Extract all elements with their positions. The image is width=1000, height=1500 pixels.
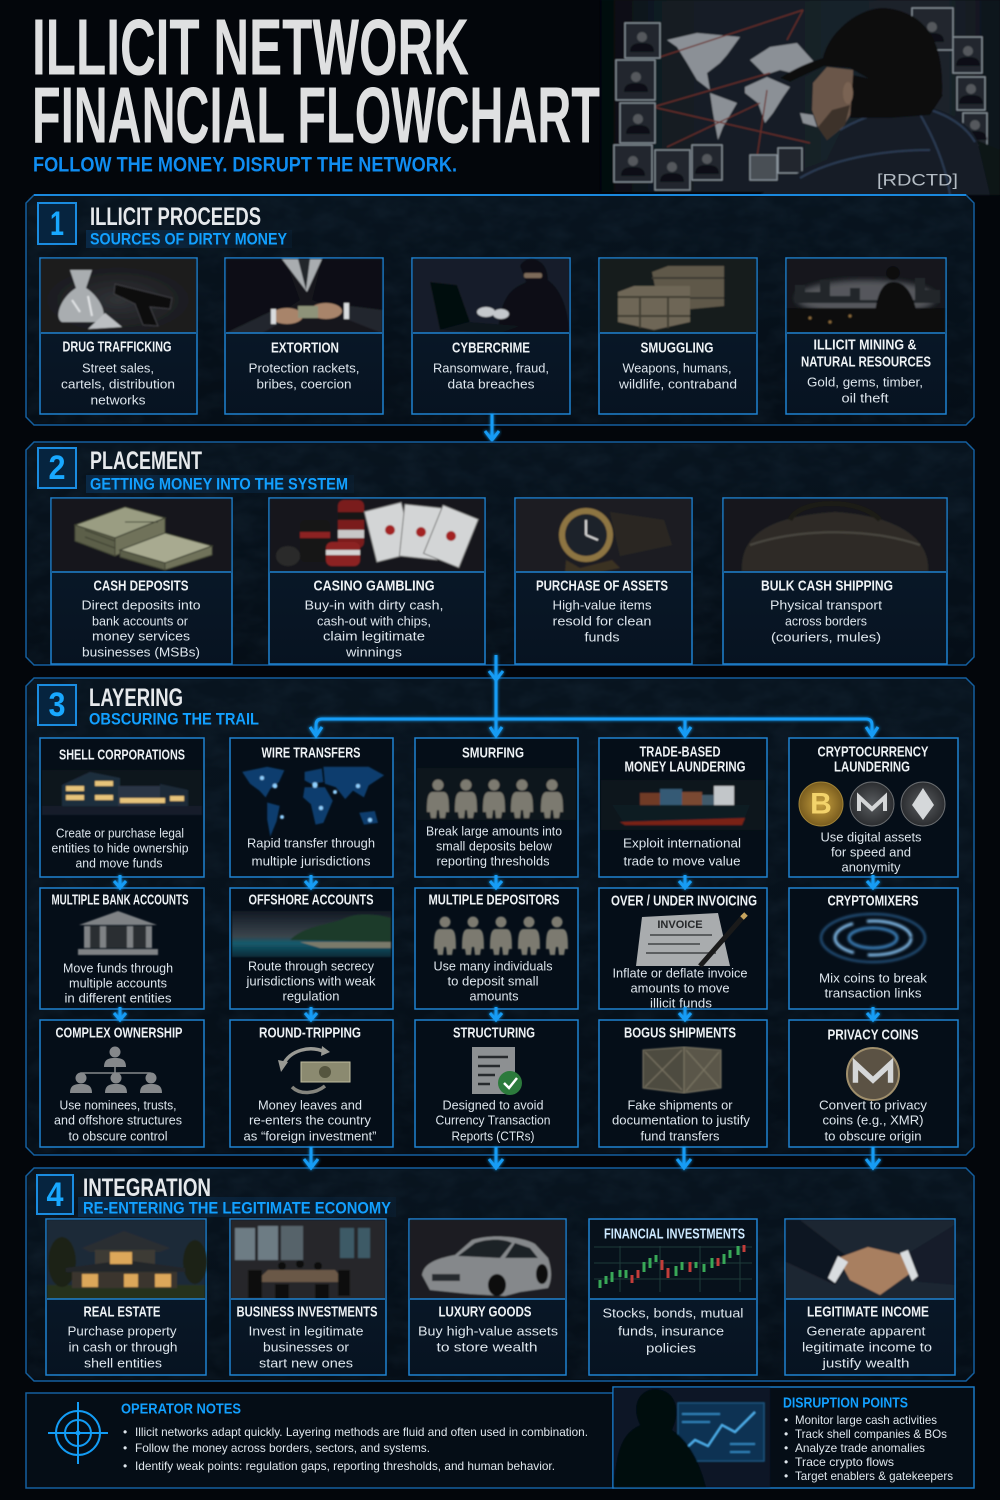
- icon: money cycle: [278, 1046, 350, 1093]
- card: trade-based money laundering: Exploit international: [623, 836, 741, 850]
- card: cybercrime: CYBERCRIME: [452, 340, 530, 356]
- card: over / under invoicing: illicit funds: [650, 996, 713, 1010]
- notes list: •: [123, 1441, 127, 1455]
- number badge 4: 4: [46, 1176, 64, 1214]
- card: multiple depositors: MULTIPLE DEPOSITORS: [428, 892, 560, 908]
- card: bogus shipments: documentation to justify: [612, 1112, 751, 1128]
- card: wire transfers: Rapid transfer through: [247, 836, 375, 850]
- card: trade-based money laundering: [599, 738, 767, 877]
- card: multiple bank accounts: in different entities: [64, 990, 172, 1006]
- image: hooded analyst at monitors: [614, 1388, 770, 1487]
- number badge 2: [38, 448, 76, 488]
- card: complex ownership: Use nominees, trusts,: [60, 1098, 176, 1112]
- card: complex ownership: COMPLEX OWNERSHIP: [56, 1024, 182, 1042]
- disruption list: Monitor large cash activities: [795, 1413, 937, 1427]
- card: business investments: [230, 1219, 386, 1375]
- image: luxury car: [410, 1220, 565, 1299]
- image: row of depositors: [434, 916, 568, 955]
- card: offshore accounts: OFFSHORE ACCOUNTS: [248, 892, 374, 908]
- card: round-tripping: ROUND-TRIPPING: [259, 1024, 361, 1042]
- image: crates: [600, 259, 756, 333]
- title: ILLICIT NETWORK: [32, 2, 469, 92]
- card: extortion: bribes, coercion: [256, 376, 352, 392]
- card: financial investments: [589, 1219, 757, 1375]
- image: container ship: [601, 780, 765, 830]
- heading: OPERATOR NOTES: [121, 1400, 241, 1418]
- image: crypto coins: B: [810, 788, 832, 820]
- card: illicit mining: NATURAL RESOURCES: [801, 354, 931, 370]
- disruption list: Analyze trade anomalies: [795, 1441, 925, 1455]
- arrow: proceeds to placement: [485, 414, 499, 440]
- disruption list: •: [784, 1441, 788, 1455]
- card: real estate: Purchase property: [68, 1324, 177, 1338]
- card: privacy coins: PRIVACY COINS: [828, 1026, 918, 1044]
- card: drug trafficking: networks: [90, 392, 146, 408]
- card: multiple depositors: [415, 888, 578, 1009]
- card: cybercrime: [412, 258, 570, 414]
- image: stacks of cash: [52, 499, 231, 572]
- card: cryptomixers: Mix coins to break: [819, 970, 928, 986]
- card: real estate: shell entities: [84, 1356, 163, 1370]
- image: tropical island: [232, 911, 391, 957]
- image: drugs and pistol: [41, 259, 196, 334]
- card: bogus shipments: [599, 1020, 767, 1147]
- panel: layering: [26, 678, 974, 1155]
- image: crypto coins: [799, 782, 945, 826]
- card: purchase of assets: resold for clean: [552, 614, 652, 628]
- card: business investments: businesses or: [263, 1340, 350, 1354]
- disruption list: •: [784, 1427, 788, 1441]
- image: duffel bag: [724, 499, 946, 572]
- disruption list: Target enablers & gatekeepers: [795, 1469, 953, 1483]
- card: financial investments: funds, insurance: [618, 1324, 724, 1338]
- map continents: [667, 33, 817, 140]
- card: cryptocurrency laundering: CRYPTOCURRENCY: [818, 744, 928, 760]
- notes list: Follow the money across borders, sectors, and systems.: [135, 1441, 430, 1455]
- card: cryptocurrency laundering: [789, 738, 958, 877]
- heading: SOURCES OF DIRTY MONEY: [90, 230, 288, 248]
- card: business investments: Invest in legitimate: [248, 1324, 364, 1338]
- card: cybercrime: Ransomware, fraud,: [433, 360, 549, 376]
- card: smuggling: [599, 258, 757, 414]
- card: legitimate income: LEGITIMATE INCOME: [807, 1304, 929, 1320]
- heading: PLACEMENT: [90, 447, 202, 475]
- card: casino gambling: claim legitimate: [323, 628, 425, 644]
- image: glowing world map: [242, 767, 384, 836]
- card: round-tripping: Money leaves and: [258, 1098, 362, 1112]
- card: cryptocurrency laundering: for speed and: [831, 844, 911, 860]
- icon: bank building: [78, 911, 158, 955]
- card: shell corporations: and move funds: [76, 856, 163, 870]
- card: wire transfers: multiple jurisdictions: [252, 854, 371, 868]
- chart: candlesticks: [590, 1220, 756, 1299]
- card: cryptomixers: [789, 888, 958, 1009]
- card: privacy coins: [789, 1020, 958, 1147]
- card: real estate: [46, 1219, 207, 1375]
- card: over / under invoicing: amounts to move: [630, 980, 730, 996]
- heading: GETTING MONEY INTO THE SYSTEM: [90, 474, 348, 494]
- card: over / under invoicing: [599, 888, 767, 1010]
- card: multiple bank accounts: multiple accounts: [69, 976, 167, 990]
- card: cash deposits: businesses (MSBs): [82, 644, 200, 660]
- panel: placement: [26, 442, 974, 665]
- card: financial investments: Stocks, bonds, mutual: [602, 1306, 744, 1320]
- heading: DISRUPTION POINTS: [783, 1394, 908, 1412]
- card: round-tripping: re-enters the country: [249, 1112, 372, 1128]
- image: dark city and figure: [787, 259, 945, 333]
- card: offshore accounts: regulation: [282, 988, 340, 1004]
- image: hooded hacker: [413, 259, 569, 333]
- card: cash deposits: CASH DEPOSITS: [94, 578, 188, 594]
- card: purchase of assets: PURCHASE OF ASSETS: [536, 578, 668, 594]
- card: legitimate income: legitimate income to: [802, 1340, 932, 1354]
- card: wire transfers: WIRE TRANSFERS: [262, 744, 360, 762]
- card: bulk cash shipping: [723, 498, 947, 664]
- card: drug trafficking: DRUG TRAFFICKING: [62, 338, 172, 356]
- card: offshore accounts: jurisdictions with weak: [245, 974, 376, 988]
- card: purchase of assets: High-value items: [552, 598, 652, 612]
- card: bogus shipments: Fake shipments or: [628, 1098, 733, 1112]
- notes list: Illicit networks adapt quickly. Layering methods are fluid and often used in combination.: [135, 1425, 588, 1439]
- notes list: Identify weak points: regulation gaps, reporting thresholds, and human behavior.: [135, 1459, 555, 1473]
- number badge 3: 3: [48, 686, 66, 724]
- disruption list: [784, 1413, 953, 1483]
- card: trade-based money laundering: MONEY LAUNDERING: [624, 758, 746, 776]
- card: shell corporations: entities to hide ownership: [52, 840, 188, 856]
- card: complex ownership: and offshore structures: [54, 1112, 182, 1128]
- disruption list: •: [784, 1413, 788, 1427]
- arrows: between layering rows: [114, 875, 879, 1020]
- card: structuring: [415, 1020, 578, 1147]
- card: casino gambling: [269, 498, 485, 664]
- card: offshore accounts: [230, 888, 393, 1009]
- card: drug trafficking: cartels, distribution: [61, 376, 175, 392]
- image: hands with cash: [226, 259, 382, 333]
- card: casino gambling: Buy-in with dirty cash,: [304, 598, 444, 612]
- card: over / under invoicing: OVER / UNDER INVOICING: [611, 892, 757, 910]
- disruption list: •: [784, 1455, 788, 1469]
- heading: ILLICIT PROCEEDS: [90, 203, 261, 231]
- card: smuggling: wildlife, contraband: [618, 376, 737, 392]
- card: multiple bank accounts: Move funds through: [63, 960, 173, 976]
- tagline: FOLLOW THE MONEY. DISRUPT THE NETWORK.: [33, 154, 457, 176]
- image: swirl vortex: [821, 914, 925, 962]
- card: illicit mining: [786, 258, 946, 414]
- heading: LAYERING: [89, 684, 183, 712]
- card: shell corporations: SHELL CORPORATIONS: [59, 746, 185, 764]
- card: structuring: STRUCTURING: [453, 1024, 535, 1042]
- card: illicit mining: Gold, gems, timber,: [807, 374, 923, 390]
- number badge 1: 1: [50, 205, 64, 243]
- title: [32, 2, 600, 160]
- redaction tag: [RDCTD]: [877, 170, 958, 190]
- heading: RE-ENTERING THE LEGITIMATE ECONOMY: [83, 1198, 392, 1218]
- card: privacy coins: coins (e.g., XMR): [822, 1112, 924, 1128]
- card: shell corporations: Create or purchase legal: [56, 826, 184, 840]
- card: legitimate income: Generate apparent: [806, 1324, 926, 1338]
- card: multiple depositors: Use many individuals: [434, 958, 553, 974]
- card: smurfing: small deposits below: [436, 838, 553, 854]
- notes list: •: [123, 1459, 127, 1473]
- card: financial investments: policies: [646, 1340, 697, 1356]
- image: handshake: [786, 1220, 954, 1299]
- panel: operator notes: [26, 1393, 613, 1488]
- number badge 1: [38, 203, 76, 244]
- card: cash deposits: money services: [92, 628, 191, 644]
- card: bogus shipments: fund transfers: [640, 1128, 720, 1144]
- card: cryptocurrency laundering: Use digital assets: [820, 830, 922, 844]
- card: privacy coins: to obscure origin: [824, 1128, 922, 1144]
- card: wire transfers: [230, 738, 393, 877]
- card: bulk cash shipping: BULK CASH SHIPPING: [761, 578, 893, 594]
- notes list: [123, 1425, 588, 1473]
- card: multiple bank accounts: MULTIPLE BANK ACCOUNTS: [52, 892, 188, 908]
- card: privacy coins: Convert to privacy: [819, 1098, 928, 1112]
- panel: integration: [26, 1168, 974, 1381]
- image: row of figures: [417, 768, 576, 820]
- card: luxury goods: [409, 1219, 566, 1375]
- card: casino gambling: CASINO GAMBLING: [314, 578, 434, 594]
- card: cash deposits: Direct deposits into: [82, 598, 200, 612]
- card: smurfing: SMURFING: [462, 744, 524, 762]
- card: cybercrime: data breaches: [448, 376, 535, 392]
- card: round-tripping: as “foreign investment”: [244, 1128, 376, 1144]
- image: chips and cards: [270, 499, 484, 572]
- disruption list: Track shell companies & BOs: [795, 1427, 947, 1441]
- card: bulk cash shipping: across borders: [785, 614, 867, 628]
- card: offshore accounts: Route through secrecy: [248, 958, 374, 974]
- disruption list: •: [784, 1469, 788, 1483]
- heading: [86, 203, 292, 248]
- card: smurfing: Break large amounts into: [426, 824, 562, 838]
- image: invoice and pen: INVOICE: [657, 919, 703, 931]
- card: legitimate income: [785, 1219, 955, 1375]
- card: casino gambling: cash-out with chips,: [317, 614, 431, 628]
- card: cash deposits: bank accounts or: [92, 614, 189, 628]
- card: luxury goods: LUXURY GOODS: [438, 1304, 532, 1320]
- card: bulk cash shipping: Physical transport: [770, 598, 882, 612]
- card: luxury goods: Buy high-value assets: [418, 1324, 559, 1338]
- card: purchase of assets: funds: [584, 630, 620, 644]
- image: modern house at night: [47, 1220, 207, 1299]
- card: structuring: Reports (CTRs): [452, 1128, 534, 1144]
- disruption list: Trace crypto flows: [795, 1455, 894, 1469]
- card: cash deposits: [51, 498, 232, 664]
- number badge 2: 2: [48, 449, 66, 487]
- image: office building at night: [42, 770, 202, 815]
- card: complex ownership: to obscure control: [68, 1128, 168, 1144]
- card: multiple depositors: amounts: [470, 988, 519, 1004]
- card: illicit mining: ILLICIT MINING &: [814, 336, 917, 354]
- number badge 3: [38, 685, 76, 725]
- card: real estate: REAL ESTATE: [84, 1304, 160, 1320]
- icon: ownership tree: [70, 1046, 162, 1093]
- panel: disruption points: [613, 1387, 974, 1488]
- icon: monero coin: [847, 1048, 899, 1100]
- card: extortion: EXTORTION: [271, 340, 339, 356]
- icon: target crosshair: [48, 1402, 108, 1464]
- heading: [86, 447, 354, 494]
- card: business investments: BUSINESS INVESTMENTS: [236, 1304, 378, 1320]
- heading: [89, 684, 259, 728]
- card: bogus shipments: BOGUS SHIPMENTS: [624, 1024, 736, 1042]
- card: extortion: Protection rackets,: [248, 360, 360, 376]
- heading: [78, 1174, 396, 1218]
- notes list: •: [123, 1425, 127, 1439]
- heading: OBSCURING THE TRAIL: [89, 710, 259, 728]
- card: multiple depositors: to deposit small: [448, 974, 539, 988]
- image: wooden crate: [643, 1047, 721, 1093]
- card: structuring: Currency Transaction: [436, 1112, 550, 1128]
- card: complex ownership: [40, 1020, 204, 1147]
- card: business investments: start new ones: [259, 1356, 354, 1370]
- card: casino gambling: winnings: [345, 644, 403, 660]
- card: structuring: Designed to avoid: [442, 1098, 544, 1112]
- card: drug trafficking: Street sales,: [82, 360, 154, 376]
- card: cryptocurrency laundering: anonymity: [842, 860, 901, 874]
- card: smurfing: reporting thresholds: [436, 854, 550, 868]
- card: drug trafficking: [40, 258, 197, 414]
- card: smuggling: Weapons, humans,: [622, 360, 732, 376]
- icon: report with check mark: [472, 1047, 522, 1095]
- card: smurfing: [415, 738, 578, 877]
- header photo: analyst in front of world map: [600, 0, 1000, 195]
- image: boardroom: [231, 1220, 385, 1299]
- panel: illicit proceeds: [26, 195, 974, 425]
- image: invoice and pen: [636, 913, 746, 966]
- card: legitimate income: justify wealth: [821, 1356, 910, 1370]
- card: financial investments: FINANCIAL INVESTMENTS: [604, 1226, 745, 1242]
- card: luxury goods: to store wealth: [436, 1340, 538, 1354]
- arrows: flow into layering branches: [310, 655, 878, 736]
- card: round-tripping: [230, 1020, 393, 1147]
- card: over / under invoicing: Inflate or deflate invoice: [612, 966, 748, 980]
- arrows: layering into integration: [304, 1147, 880, 1168]
- image: luxury watch: [516, 499, 691, 572]
- card: trade-based money laundering: trade to move value: [624, 854, 740, 868]
- card: cryptomixers: CRYPTOMIXERS: [828, 892, 918, 910]
- card: illicit mining: oil theft: [842, 390, 889, 406]
- heading: INTEGRATION: [83, 1174, 211, 1202]
- card: extortion: [225, 258, 383, 414]
- card: multiple bank accounts: [40, 888, 204, 1009]
- card: real estate: in cash or through: [68, 1340, 178, 1354]
- card: cryptomixers: transaction links: [824, 986, 922, 1000]
- card: cryptocurrency laundering: LAUNDERING: [834, 758, 910, 776]
- card: bulk cash shipping: (couriers, mules): [771, 630, 881, 644]
- card: purchase of assets: [515, 498, 692, 664]
- card: trade-based money laundering: TRADE-BASED: [640, 744, 721, 760]
- card: smuggling: SMUGGLING: [640, 340, 714, 356]
- title: FINANCIAL FLOWCHART: [32, 70, 600, 160]
- card: shell corporations: [40, 738, 204, 877]
- number badge 4: [37, 1175, 73, 1214]
